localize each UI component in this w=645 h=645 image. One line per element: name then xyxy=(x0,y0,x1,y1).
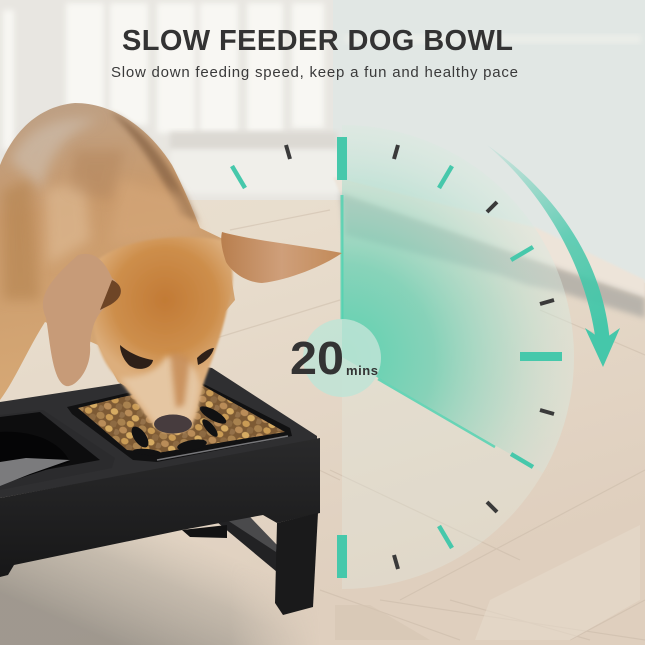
top surface xyxy=(0,366,317,498)
eyes xyxy=(120,345,153,369)
floor planks xyxy=(210,210,645,640)
wedge edge lower xyxy=(378,379,495,447)
green minor ticks xyxy=(232,166,533,548)
title: SLOW FEEDER DOG BOWL xyxy=(122,25,513,57)
kibble xyxy=(78,384,285,453)
front face xyxy=(0,438,320,577)
elevated stand xyxy=(0,366,320,615)
wall right xyxy=(333,0,645,283)
green time wedge xyxy=(342,125,574,473)
timer unit: mins xyxy=(346,363,378,378)
dog xyxy=(0,103,342,434)
left bowl xyxy=(0,410,115,490)
front leg xyxy=(275,513,318,615)
pale dial disc xyxy=(342,125,574,589)
right skirting xyxy=(333,177,645,298)
timer value: 20 xyxy=(290,332,344,384)
radiator xyxy=(3,3,324,150)
left ear xyxy=(43,254,120,386)
top band on wall xyxy=(348,37,638,41)
right ear xyxy=(221,232,342,283)
fur highlight on shoulders xyxy=(10,118,100,190)
muzzle xyxy=(120,356,200,428)
slow feeder ridges xyxy=(128,403,228,456)
subtitle: Slow down feeding speed, keep a fun and healthy pace xyxy=(111,64,518,81)
wall left xyxy=(0,0,345,200)
wedge edge left xyxy=(340,195,344,320)
centre circle xyxy=(303,319,381,397)
bowl tray highlight xyxy=(157,436,288,460)
dark minor ticks xyxy=(286,145,554,569)
head xyxy=(92,237,233,434)
back shading xyxy=(110,112,198,222)
skirting left xyxy=(170,132,338,150)
dial xyxy=(232,125,620,589)
floor shadow under stand xyxy=(0,538,296,645)
major ticks xyxy=(337,137,562,578)
strut xyxy=(217,517,277,572)
arrow xyxy=(487,145,620,367)
body and legs xyxy=(0,103,235,400)
right bowl tray xyxy=(67,382,292,462)
nose xyxy=(154,414,192,434)
back foot xyxy=(182,525,227,538)
right skirting shadow xyxy=(340,193,645,318)
